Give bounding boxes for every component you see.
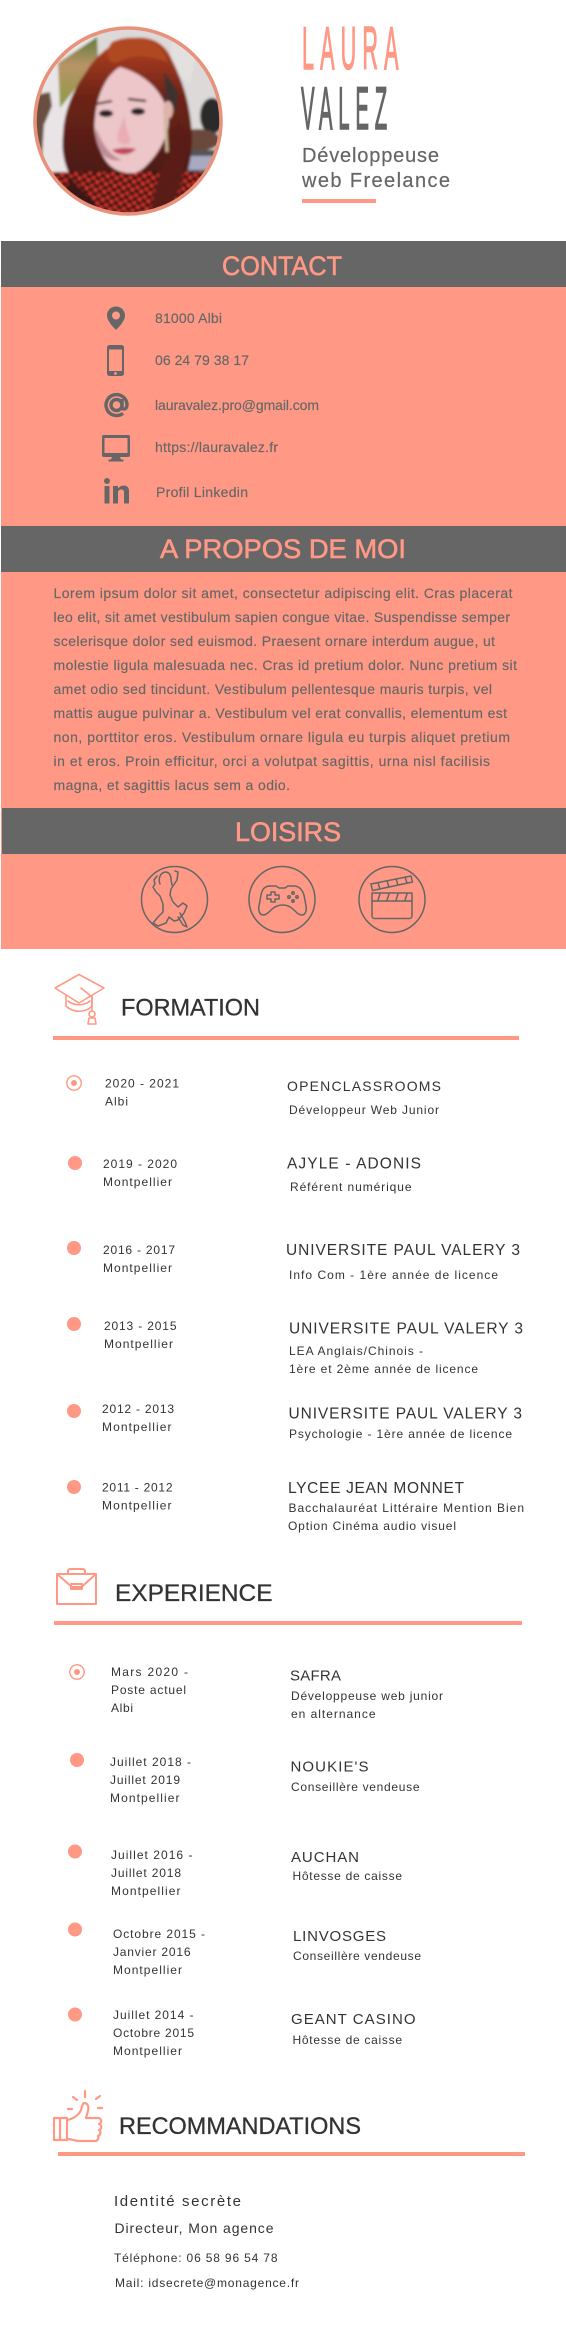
entry: Geant Casino (68, 2008, 416, 2058)
contact: address: 81000 Albi (155, 310, 222, 326)
job title (301, 145, 450, 192)
job title: web Freelance (301, 170, 450, 192)
icon: briefcase (57, 1569, 96, 1604)
entry: Safra (70, 1665, 443, 1721)
icon: dancer (142, 866, 208, 932)
dates and place (113, 2008, 194, 2058)
dates and place: 2020 - 2021 (105, 1076, 179, 1090)
about text (54, 585, 517, 793)
school: UNIVERSITE PAUL VALERY 3 (288, 1406, 522, 1422)
accent bar (302, 199, 376, 203)
dates and place (103, 1157, 177, 1189)
diploma: Développeur Web Junior (289, 1103, 439, 1117)
contact: phone: 06 24 79 38 17 (155, 352, 249, 368)
entry: Noukie's (70, 1753, 420, 1805)
about text: Lorem ipsum dolor sit amet, consectetur adipiscing elit. Cras placerat (54, 585, 513, 601)
role: Hôtesse de caisse (292, 2033, 402, 2047)
entry: 2016-2017 Universite Paul Valery (67, 1241, 520, 1282)
marker (70, 1753, 84, 1767)
marker: current (67, 1076, 81, 1090)
dates and place: Montpellier (113, 2044, 182, 2058)
about text: molestie ligula malesuada nec. Cras id pretium dolor. Nunc pretium sit (54, 657, 517, 673)
employer: SAFRA (290, 1668, 341, 1684)
about background (1, 526, 566, 808)
employer: AUCHAN (291, 1849, 359, 1866)
heading: experience: EXPERIENCE (115, 1580, 272, 1607)
dates and place: Juillet 2018 (111, 1866, 181, 1880)
hobbies background (1, 808, 566, 949)
role: Conseillère vendeuse (293, 1949, 421, 1963)
dates and place: Albi (111, 1701, 133, 1715)
school: UNIVERSITE PAUL VALERY 3 (286, 1242, 520, 1259)
contact: website: https://lauravalez.fr (155, 439, 278, 455)
panel: hobbies (1, 808, 566, 949)
heading: recommendations: RECOMMANDATIONS (119, 2113, 361, 2140)
entry: 2012-2013 Universite Paul Valery (67, 1402, 522, 1441)
employer: GEANT CASINO (291, 2011, 416, 2028)
role: Développeuse web junior (291, 1689, 443, 1703)
about text: mattis augue pulvinar a. Vestibulum vel erat convallis, elementum est (54, 705, 507, 721)
dates and place: Juillet 2018 - (110, 1755, 191, 1769)
diploma (289, 1344, 478, 1376)
about text: in et eros. Proin efficitur, orci a volutpat sagittis, urna nisl facilisis (54, 753, 490, 769)
about text: leo elit, sit amet vestibulum sapien congue vitae. Suspendisse semper (54, 609, 510, 625)
section rule (53, 1036, 519, 1040)
marker: current (70, 1665, 84, 1679)
dates and place (105, 1076, 179, 1108)
heading: hobbies: LOISIRS (235, 817, 341, 847)
role: en alternance (291, 1707, 376, 1721)
about header band (1, 526, 566, 572)
contact header band (1, 241, 566, 287)
reference: name: Identité secrète (114, 2193, 241, 2210)
dates and place: Montpellier (111, 1884, 180, 1898)
school: LYCEE JEAN MONNET (288, 1480, 465, 1497)
employer: NOUKIE'S (290, 1758, 368, 1776)
dates and place: Montpellier (103, 1175, 172, 1189)
dates and place (113, 1927, 205, 1977)
diploma: Bacchalauréat Littéraire Mention Bien (288, 1501, 524, 1515)
school: UNIVERSITE PAUL VALERY 3 (289, 1320, 523, 1338)
heading: formation: FORMATION (121, 994, 260, 1022)
section rule (54, 1621, 522, 1625)
dates and place: Juillet 2019 (110, 1773, 180, 1787)
panel: contact (1, 241, 566, 526)
name: Laura: LAURA (302, 14, 405, 82)
dates and place: Montpellier (113, 1963, 182, 1977)
diploma: Option Cinéma audio visuel (288, 1519, 456, 1533)
dates and place: Janvier 2016 (113, 1945, 191, 1959)
dates and place: Mars 2020 - (111, 1665, 188, 1679)
icon: smartphone (107, 345, 124, 376)
entry: 2019-2020 Ajyle (68, 1156, 421, 1194)
school: OPENCLASSROOMS (287, 1078, 441, 1094)
dates and place: 2013 - 2015 (104, 1319, 177, 1333)
icon: linkedin (104, 478, 129, 504)
dates and place: Poste actuel (111, 1683, 186, 1697)
dates and place: Octobre 2015 (113, 2026, 194, 2040)
icon: clapperboard (359, 866, 425, 932)
icon: at sign (106, 395, 127, 416)
reference: phone: Téléphone: 06 58 96 54 78 (114, 2251, 278, 2265)
entry: 2020-2021 OpenClassrooms (67, 1076, 441, 1117)
name: Valez: VALEZ (301, 75, 393, 142)
school: AJYLE - ADONIS (287, 1156, 421, 1172)
section: formation (53, 974, 524, 1533)
dates and place: Albi (105, 1094, 128, 1108)
role: Conseillère vendeuse (291, 1780, 420, 1794)
reference: position: Directeur, Mon agence (114, 2220, 274, 2236)
about text: magna, et sagittis lacus sem a odio. (54, 777, 290, 793)
about text: non, porttitor eros. Vestibulum ornare ligula eu turpis aliquet pretium (54, 729, 510, 745)
dates and place: 2011 - 2012 (102, 1480, 173, 1494)
about text: scelerisque dolor sed euismod. Praesent ornare interdum augue, ut (54, 633, 495, 649)
heading: contact: CONTACT (222, 251, 342, 281)
dates and place (102, 1402, 174, 1434)
dates and place: Octobre 2015 - (113, 1927, 205, 1941)
marker (68, 1844, 82, 1858)
diploma: LEA Anglais/Chinois - (289, 1344, 423, 1358)
diploma (288, 1501, 524, 1533)
about text: amet odio sed tincidunt. Vestibulum pellentesque mauris turpis, vel (54, 681, 492, 697)
icon: desktop monitor (102, 435, 130, 462)
dates and place (111, 1848, 192, 1898)
photo: portrait of Laura (34, 27, 224, 220)
marker (68, 1156, 82, 1170)
section: recommendations (54, 2091, 525, 2290)
icon: graduation cap (55, 974, 104, 1024)
job title: Développeuse (302, 145, 439, 167)
marker (68, 2008, 82, 2022)
marker (67, 1241, 81, 1255)
entry: Linvosges (68, 1922, 421, 1977)
contact background (1, 241, 566, 526)
marker (67, 1404, 81, 1418)
diploma: 1ère et 2ème année de licence (289, 1362, 478, 1376)
entry: 2011-2012 Lycee Jean Monnet (67, 1480, 524, 1533)
dates and place: Montpellier (102, 1498, 172, 1512)
marker (67, 1480, 81, 1494)
dates and place: 2019 - 2020 (103, 1157, 177, 1171)
dates and place: 2012 - 2013 (102, 1402, 174, 1416)
dates and place: Montpellier (104, 1337, 173, 1351)
contact: email: lauravalez.pro@gmail.com (155, 397, 319, 413)
entry: 2013-2015 Universite Paul Valery (67, 1317, 523, 1376)
dates and place: 2016 - 2017 (103, 1243, 175, 1257)
heading: about me: A PROPOS DE MOI (160, 534, 406, 564)
dates and place (103, 1243, 175, 1275)
reference: email: Mail: idsecrete@monagence.fr (115, 2276, 299, 2290)
dates and place (102, 1480, 173, 1512)
section: experience (54, 1569, 522, 2058)
diploma: Référent numérique (290, 1180, 412, 1194)
marker (67, 1317, 81, 1331)
diploma: Psychologie - 1ère année de licence (289, 1427, 512, 1441)
dates and place (111, 1665, 188, 1715)
dates and place: Juillet 2016 - (111, 1848, 192, 1862)
employer: LINVOSGES (293, 1928, 386, 1945)
icon: thumbs up (54, 2091, 102, 2141)
dates and place (110, 1755, 191, 1805)
role: Hôtesse de caisse (292, 1869, 402, 1883)
dates and place: Montpellier (102, 1420, 172, 1434)
role (291, 1689, 443, 1721)
icon: location pin (107, 306, 125, 330)
marker (68, 1922, 82, 1936)
dates and place: Montpellier (103, 1261, 172, 1275)
dates and place (104, 1319, 177, 1351)
dates and place: Juillet 2014 - (113, 2008, 194, 2022)
contact: linkedin: Profil Linkedin (156, 484, 248, 500)
icon: game controller (249, 866, 315, 932)
panel: about me (1, 526, 566, 808)
hobbies header band (2, 808, 566, 854)
entry: Auchan (68, 1844, 402, 1898)
section rule (58, 2152, 525, 2156)
dates and place: Montpellier (110, 1791, 180, 1805)
diploma: Info Com - 1ère année de licence (289, 1268, 498, 1282)
